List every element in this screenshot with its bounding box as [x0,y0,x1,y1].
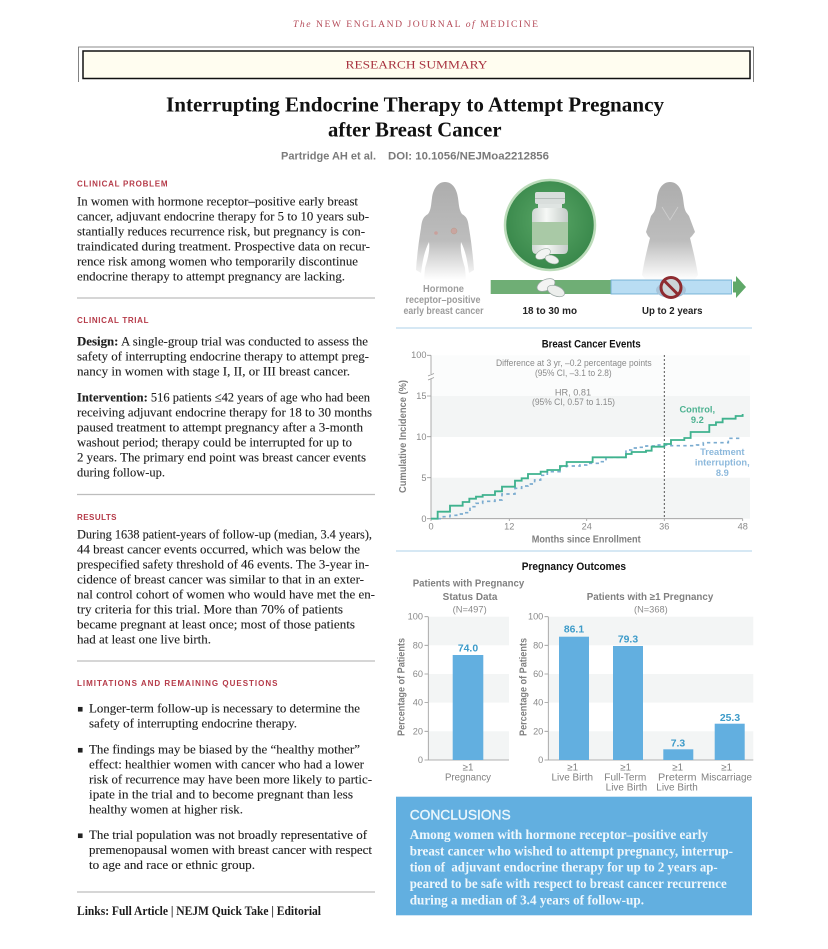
text block: results: cidence of breast cancer was similar to that in an exter- [77,572,364,586]
text block: intervention: 2 years. The primary end point was breast cancer events [77,451,366,465]
bar: full-term live birth 79.3: 79.3 [618,634,638,645]
panel: clinical trial [77,316,372,480]
heading: clinical problem: CLINICAL PROBLEM [77,180,168,189]
chart heading [413,579,525,615]
text block: conclusion statement: breast cancer who wished to attempt pregnancy, interrup- [410,843,733,858]
text block: conclusion statement: during a median of 3.4 years of follow-up. [410,892,644,907]
x axis: 48 [738,521,748,531]
text block: results: nal control cohort of women who would have met the en- [77,587,375,601]
bar: pregnancy 74.0: Pregnancy [445,773,491,784]
reference line at 36 months [663,355,665,519]
axes [396,612,509,765]
text block: intervention: receiving adjuvant endocrine therapy for 18 to 30 months [77,406,372,420]
annotation: difference at 3 years: Difference at 3 yr, –0.2 percentage points [496,358,652,368]
icon: pill bottle in green circle [505,180,595,270]
label: treatment interruption 8.9: interruption, [695,457,750,467]
y axis: 100 [411,350,426,360]
y axis: 5 [421,473,426,483]
heading: clinical trial: CLINICAL TRIAL [77,316,149,325]
text block: results: had at least one live birth. [77,632,211,646]
text block: results [77,527,375,646]
bullet 1 [78,702,360,731]
axes: 20 [413,726,423,736]
bar: full-term live birth 79.3 [604,634,647,794]
text block: results: 44 breast cancer events occurred, which was below the [77,542,360,556]
bullet 3: to age and race or ethnic group. [89,858,255,872]
y axis: 15 [416,391,426,401]
line: treatment interruption [431,438,743,519]
text block: design [77,335,369,379]
bullet 2: ipate in the trial and to become pregnant than less [89,788,353,802]
bar: miscarriage 25.3: 25.3 [720,713,740,724]
icon: woman with breast cancer [416,182,474,280]
bar: preterm live birth 7.3 [656,739,698,794]
bullet 2: healthy women at higher risk. [89,802,243,816]
label: hormone receptor-positive early breast cancer: early breast cancer [404,306,484,317]
bullet 1: Longer-term follow-up is necessary to determine the [89,702,360,716]
text block: conclusion statement: tion of adjuvant endocrine therapy for up to 2 years ap- [410,860,718,875]
annotation: difference at 3 years: (95% CI, –3.1 to 2.8) [535,368,612,378]
axes: 20 [533,726,543,736]
banner: research summary: RESEARCH SUMMARY [346,60,488,72]
bullet 2 [78,742,372,816]
axes: 80 [413,640,423,650]
plot bands [428,617,509,760]
bullet 2: The findings may be biased by the “healthy mother” [89,742,360,756]
label: hormone receptor-positive early breast cancer: receptor–positive [406,295,481,306]
bar: live birth 86.1: ≥1 [567,763,578,774]
panel: limitations and remaining questions [77,679,373,872]
bar: full-term live birth 79.3: ≥1 [620,763,631,774]
panel: clinical problem [77,180,370,284]
axes: 60 [413,669,423,679]
x axis: 24 [582,521,592,531]
text block: design: nancy in women with stage I, II, or III breast cancer. [77,365,350,379]
y axis: Cumulative Incidence (%) [398,380,409,493]
text block: clinical problem [77,195,370,284]
bar: miscarriage 25.3: Miscarriage [701,773,753,784]
chart title: Breast Cancer Events [542,338,641,350]
annotation: hazard ratio [532,388,615,407]
links: Links: Full Article | NEJM Quick Take | Editorial [77,904,321,918]
text block: intervention: during follow-up. [77,466,165,480]
chart: patients with at least one pregnancy [518,592,753,794]
x axis [428,519,748,545]
title: Interrupting Endocrine Therapy to Attempt Pregnancy [166,93,664,117]
heading: pregnancy outcomes: Pregnancy Outcomes [522,561,626,573]
bar: pregnancy 74.0: ≥1 [463,763,473,774]
bullet 2: risk of recurrence may have been more likely to partic- [89,772,372,786]
text block: clinical problem: rence risk among women who temporarily discontinue [77,255,358,269]
label: treatment interruption 8.9: Treatment [700,447,745,457]
annotation: hazard ratio: (95% CI, 0.57 to 1.15) [532,397,615,407]
icon: no-entry symbol over pills [656,278,686,298]
y axis [398,350,434,524]
masthead: The NEW ENGLAND JOURNAL of MEDICINE [293,19,538,30]
chart heading: Patients with ≥1 Pregnancy [587,592,714,603]
label: control 9.2 [679,405,715,425]
bar: live birth 86.1: Live Birth [552,773,593,784]
label: hormone receptor-positive early breast cancer [404,284,484,317]
arrow: timeline end [733,276,746,298]
bar: live birth 86.1 [552,624,593,784]
bullet 3: premenopausal women with breast cancer with respect [89,843,373,857]
text block: results: try criteria for this trial. More than 70% of patients [77,602,343,616]
y axis: 10 [416,432,426,442]
bullet 3 [78,828,373,872]
banner: research summary [78,47,754,82]
panel: results [77,513,375,646]
label: hormone receptor-positive early breast cancer: Hormone [423,284,464,295]
text block: results: became pregnant at least once; most of those patients [77,617,355,631]
axes: 100 [528,612,543,622]
axes: 0 [538,755,543,765]
timeline: treatment bar [491,280,611,294]
label: 18 to 30 mo: 18 to 30 mo [522,305,577,317]
axes: 40 [533,698,543,708]
text block: intervention: Intervention: 516 patients ≤42 years of age who had been [77,391,371,405]
text block: clinical problem: endocrine therapy to attempt pregnancy are lacking. [77,270,345,284]
axes: 80 [533,640,543,650]
icon: woman after treatment interruption [642,182,698,280]
bullet 3: The trial population was not broadly representative of [89,828,368,842]
bar: miscarriage 25.3 [701,713,753,784]
bar: pregnancy 74.0 [445,643,491,784]
chart heading: (N=497) [453,605,487,615]
axes [518,612,753,765]
text block: intervention: washout period; therapy could be interrupted for up to [77,436,352,450]
text block: conclusion statement: Among women with hormone receptor–positive early [410,827,708,842]
x axis: 36 [659,521,669,531]
x axis: 0 [428,521,434,531]
text block: intervention: paused treatment to attempt pregnancy after a 3-month [77,421,364,435]
text block: clinical problem: cancer, adjuvant endocrine therapy for 5 to 10 years sub- [77,210,369,224]
heading: results: RESULTS [77,513,117,522]
axes: 0 [418,755,423,765]
chart: patients with pregnancy status data [396,579,525,784]
text block: clinical problem: In women with hormone receptor–positive early breast [77,195,359,209]
authors and DOI: DOI: 10.1056/NEJMoa2212856 [388,150,549,162]
bar: preterm live birth 7.3: ≥1 [672,763,683,774]
bar: live birth 86.1: 86.1 [564,624,584,635]
text block: intervention [77,391,372,480]
label: treatment interruption 8.9: 8.9 [716,468,729,478]
title: after Breast Cancer [328,118,502,142]
plot bands [431,355,750,519]
line: control [431,414,743,519]
bar: miscarriage 25.3: ≥1 [721,763,732,774]
annotation: difference at 3 years [496,358,652,378]
panel: trial schema illustration [404,180,746,317]
timeline: interruption bar [611,280,732,294]
text block: conclusion statement: peared to be safe with respect to breast cancer recurrence [410,876,727,891]
chart heading: Patients with Pregnancy [413,579,525,590]
label: control 9.2: 9.2 [691,415,704,425]
axes: 40 [413,698,423,708]
bar: preterm live birth 7.3: Preterm [658,773,696,784]
text block: results: prespecified safety threshold of 46 events. The 3-year in- [77,557,369,571]
text block: conclusion statement [410,827,733,907]
axes: 100 [408,612,423,622]
label: treatment interruption 8.9 [695,447,750,478]
bar: preterm live birth 7.3: 7.3 [671,739,685,750]
label: control 9.2: Control, [679,405,715,415]
text block: design: safety of interrupting endocrine therapy to attempt preg- [77,350,369,364]
bar: full-term live birth 79.3: Live Birth [606,782,647,794]
axes: 60 [533,669,543,679]
bar: full-term live birth 79.3: Full-Term [604,773,646,784]
heading: limitations: LIMITATIONS AND REMAINING QUESTIONS [77,679,278,688]
x axis: Months since Enrollment [532,534,641,545]
plot bands [548,617,753,760]
authors and DOI: Partridge AH et al. [281,150,376,162]
text block: results: During 1638 patient-years of follow-up (median, 3.4 years), [77,527,372,541]
annotation: hazard ratio: HR, 0.81 [555,388,591,398]
chart heading [587,592,714,615]
x axis: 12 [504,521,514,531]
authors and DOI [281,150,549,162]
chart heading: (N=368) [634,605,668,615]
heading: conclusions: CONCLUSIONS [410,806,511,822]
axes: Percentage of Patients [518,637,530,736]
y axis: 0 [421,514,426,524]
chart heading: Status Data [443,592,498,603]
icon: pills on bar [535,276,566,299]
panel: conclusions [396,797,752,915]
text block: design: Design: A single-group trial was conducted to assess the [77,335,368,349]
title [166,93,664,142]
bar: preterm live birth 7.3: Live Birth [656,782,698,794]
label: up to 2 years: Up to 2 years [642,305,703,317]
text block: clinical problem: traindicated during treatment. Prospective data on recur- [77,240,370,254]
bullet 2: effect: healthier women with cancer who had a lower [89,758,365,772]
axes: Percentage of Patients [396,637,408,736]
chart: breast cancer events [398,338,750,545]
bullet 1: safety of interrupting endocrine therapy. [89,717,297,731]
bar: pregnancy 74.0: 74.0 [458,643,478,654]
text block: clinical problem: stantially reduces recurrence risk, but pregnancy is con- [77,225,365,239]
